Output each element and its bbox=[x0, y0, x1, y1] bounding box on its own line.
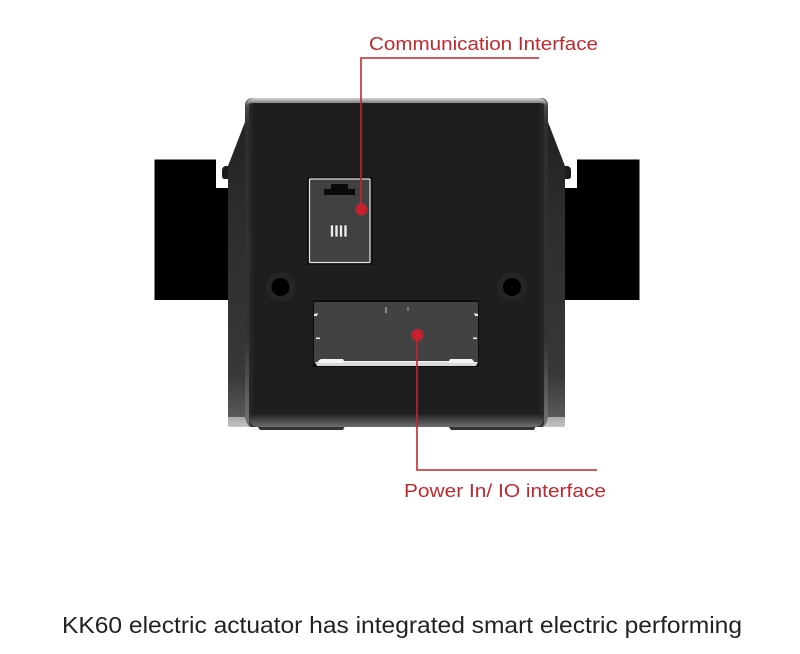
callout: power in / IO interface bbox=[404, 329, 606, 501]
front face bbox=[249, 102, 544, 427]
vertical edge bands bbox=[245, 99, 548, 427]
caption: KK60 electric actuator has integrated smart electric performing bbox=[62, 612, 742, 638]
housing silhouette bbox=[228, 98, 565, 427]
connector bottom rail bbox=[315, 362, 478, 366]
jack contacts bbox=[330, 225, 347, 237]
callout: communication interface bbox=[356, 34, 598, 216]
jack latch slot bbox=[324, 184, 355, 195]
side knobs bbox=[222, 166, 571, 179]
left black mounting flange bbox=[154, 160, 229, 300]
left mounting hole bbox=[266, 272, 296, 302]
right black mounting flange bbox=[565, 160, 640, 300]
lower corner highlights bbox=[228, 417, 565, 427]
connector pins bbox=[385, 307, 387, 313]
right mounting hole bbox=[497, 272, 527, 302]
feet bbox=[257, 426, 536, 430]
top edge highlight bbox=[246, 98, 548, 108]
actuator body bbox=[222, 98, 571, 430]
callout: communication interface: Communication Interface bbox=[369, 34, 598, 54]
bottom edge shading bbox=[249, 414, 544, 427]
communication jack bbox=[307, 177, 373, 265]
connector clips bbox=[314, 313, 478, 339]
power and IO connector bbox=[313, 300, 479, 367]
callout: power in / IO interface: Power In/ IO interface bbox=[404, 481, 606, 501]
